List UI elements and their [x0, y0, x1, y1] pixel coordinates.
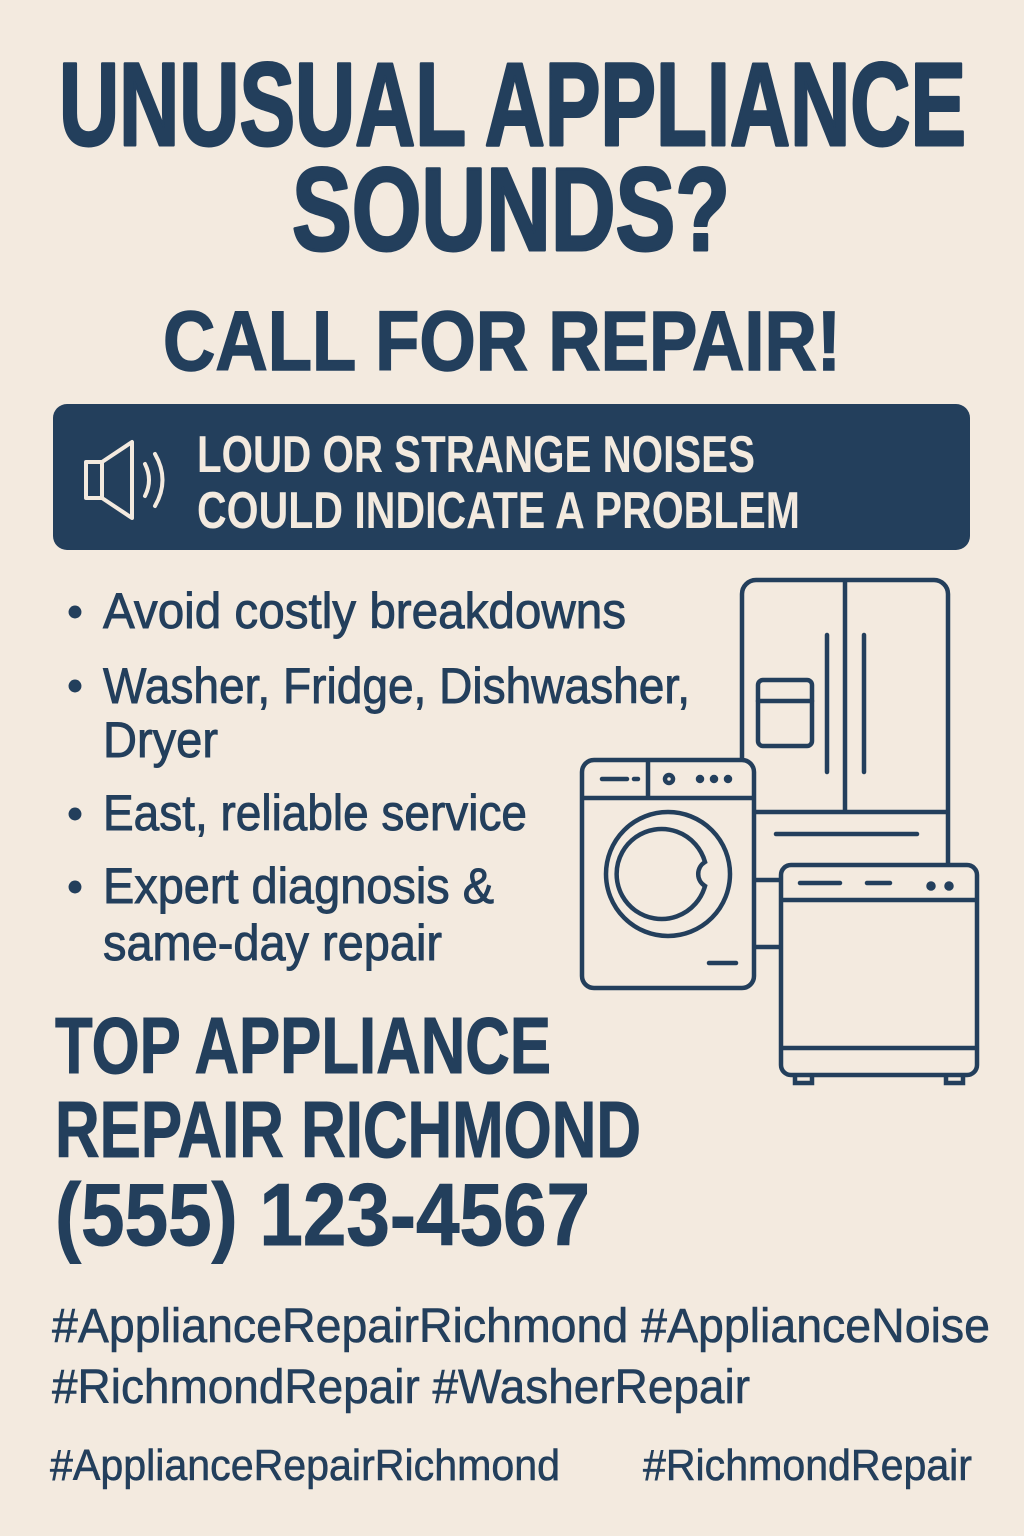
icon: appliances — [582, 580, 977, 1083]
banner — [53, 404, 970, 550]
bullet list — [69, 583, 690, 971]
icon: speaker — [86, 442, 162, 518]
hashtags: #RichmondRepair — [643, 1441, 972, 1490]
business name — [55, 1001, 641, 1174]
hashtags: #ApplianceRepairRichmond — [50, 1441, 560, 1490]
bullet list: East, reliable service — [103, 785, 527, 841]
banner text: LOUD OR STRANGE NOISES — [197, 426, 755, 484]
bullet list: Expert diagnosis & — [103, 858, 494, 914]
bullet list: same-day repair — [103, 915, 442, 971]
business name: TOP APPLIANCE — [55, 1001, 551, 1090]
bullet list: Avoid costly breakdowns — [103, 583, 626, 639]
banner text — [197, 426, 800, 540]
hashtags: #RichmondRepair #WasherRepair — [52, 1361, 750, 1414]
business name: REPAIR RICHMOND — [55, 1085, 641, 1174]
dishwasher — [781, 865, 977, 1083]
phone number: (555) 123-4567 — [55, 1165, 590, 1264]
title — [59, 39, 966, 276]
bullet list: Washer, Fridge, Dishwasher, — [103, 658, 690, 714]
banner text: COULD INDICATE A PROBLEM — [197, 482, 800, 540]
hashtags: #ApplianceRepairRichmond #ApplianceNoise — [52, 1300, 990, 1353]
washer — [582, 760, 754, 988]
fridge — [742, 580, 948, 947]
title: SOUNDS? — [292, 144, 730, 276]
hashtags — [50, 1300, 990, 1490]
bullet list: Dryer — [103, 712, 218, 768]
subtitle: CALL FOR REPAIR! — [163, 294, 841, 388]
